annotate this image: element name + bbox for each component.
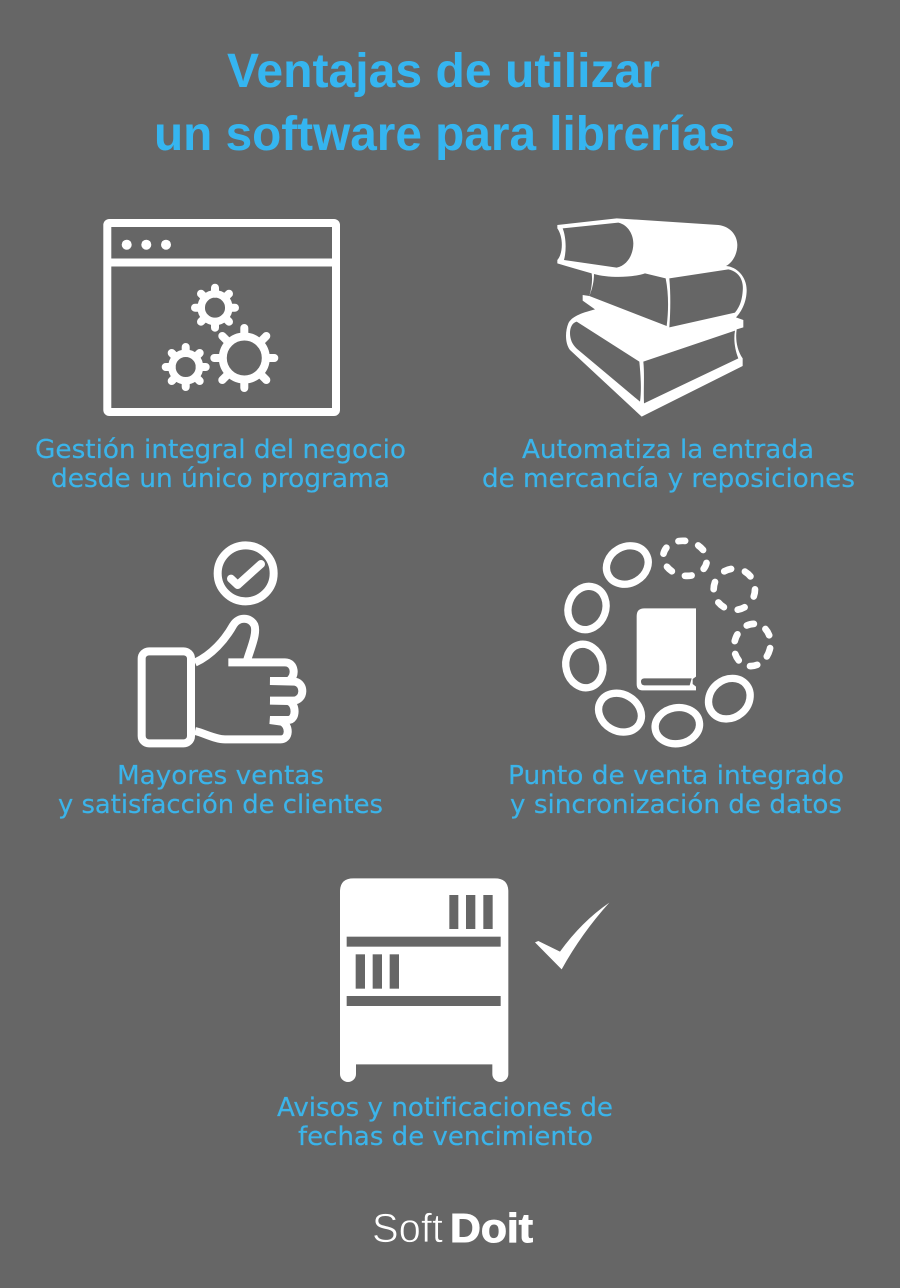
title: Ventajas de utilizar: [227, 45, 660, 98]
icon: browser window with gears: [107, 223, 336, 412]
text: gestión integral: Gestión integral del negocio: [35, 435, 406, 465]
text: automatiza: [482, 435, 855, 494]
text: gestión integral: desde un único programa: [51, 464, 390, 494]
icon: book with sync loop: [561, 537, 775, 747]
text: automatiza: de mercancía y reposiciones: [482, 464, 855, 494]
text: avisos: Avisos y notificaciones de: [277, 1093, 613, 1123]
text: punto de venta: y sincronización de datos: [510, 790, 842, 820]
text: automatiza: Automatiza la entrada: [522, 435, 814, 465]
logo: SoftDoit: [372, 1205, 533, 1251]
icon: stack of books: [557, 218, 747, 417]
title: [154, 45, 735, 161]
text: mayores ventas: Mayores ventas: [117, 761, 324, 791]
title: un software para librerías: [154, 108, 735, 161]
icon: bookshelf with check: [340, 878, 609, 1082]
text: mayores ventas: [58, 761, 383, 820]
text: avisos: [277, 1093, 613, 1152]
text: gestión integral: [35, 435, 406, 494]
logo: SoftDoit: Doit: [450, 1205, 533, 1251]
text: punto de venta: [508, 761, 844, 820]
logo: SoftDoit: Soft: [372, 1205, 444, 1251]
text: mayores ventas: y satisfacción de clientes: [58, 790, 383, 820]
text: avisos: fechas de vencimiento: [298, 1122, 593, 1152]
text: punto de venta: Punto de venta integrado: [508, 761, 844, 791]
icon: thumbs up with check badge: [142, 545, 302, 743]
